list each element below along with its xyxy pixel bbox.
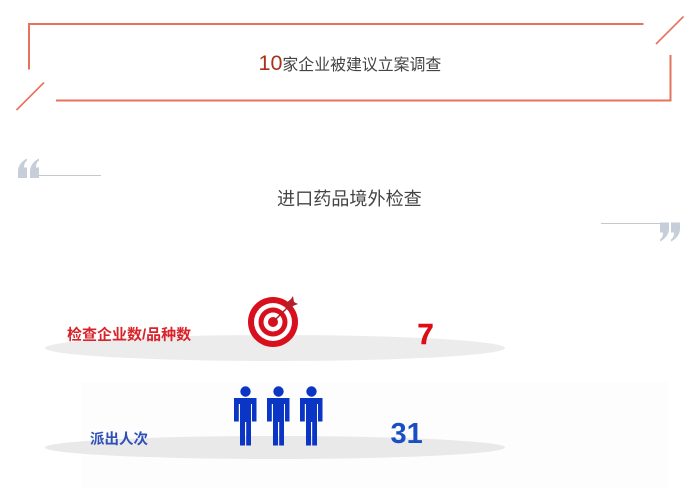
icon: target with arrow: [248, 296, 298, 347]
headline: 10 companies recommended for investigation: 10家企业被建议立案调查: [258, 51, 441, 75]
shadow ellipse: row two: [45, 436, 505, 459]
value: 31: 31: [390, 418, 423, 450]
quote mark: closing: [601, 222, 680, 242]
icon: person 3: [300, 386, 322, 446]
shadow ellipse: row one: [45, 335, 505, 361]
quote mark: opening: [18, 158, 101, 178]
label: companies inspected / varieties: 检查企业数/品种数: [67, 326, 191, 344]
value: 7: 7: [418, 319, 434, 351]
icon: person 1: [234, 386, 256, 446]
icon: three people: [234, 386, 322, 446]
label: personnel dispatched: 派出人次: [90, 430, 148, 448]
icon: person 2: [267, 386, 290, 446]
frame: headline border: [16, 16, 684, 110]
section title: 进口药品境外检查: [277, 189, 422, 209]
